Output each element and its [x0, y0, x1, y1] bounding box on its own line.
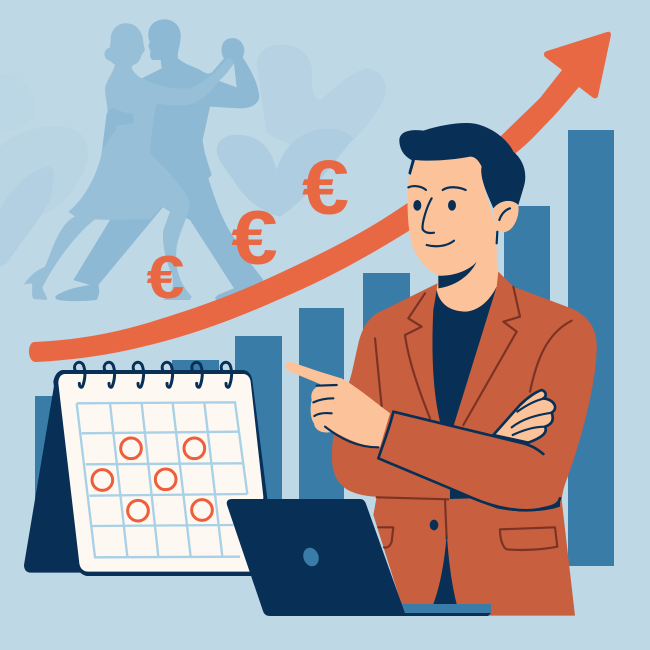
laptop base: [400, 604, 491, 616]
euro symbols: [146, 146, 349, 311]
bar 2: [172, 360, 219, 400]
marked dates: [92, 438, 212, 521]
background blobs: [0, 45, 386, 267]
lapels: [375, 287, 572, 550]
pointing hand: [286, 362, 390, 447]
facial lines: [408, 186, 510, 246]
calendar frame: [53, 370, 268, 576]
shirt hem: [450, 488, 560, 511]
bar 6: [504, 206, 550, 316]
clasped hand: [106, 108, 133, 125]
bar chart: [35, 130, 614, 566]
eyes: [413, 200, 456, 211]
button: [430, 520, 438, 530]
jacket: [332, 272, 597, 616]
bar 4: [299, 308, 344, 500]
hair: [399, 123, 525, 208]
laptop base shadow: [400, 613, 491, 616]
euro small: €: [146, 244, 185, 311]
laptop: [227, 499, 491, 616]
neck: [437, 243, 498, 312]
man: [286, 123, 597, 616]
jacket opening: [433, 533, 457, 604]
bar 1: [35, 396, 60, 506]
calendar stand: [24, 380, 93, 573]
fist: [222, 38, 243, 59]
finger lines: [512, 398, 552, 435]
laptop logo: [301, 546, 321, 568]
calendar page: [58, 374, 263, 572]
euro large: €: [302, 146, 349, 231]
growth arrow: [29, 32, 611, 362]
folded sleeve: [378, 412, 567, 510]
neck shadow: [438, 262, 477, 288]
calendar grid: [77, 402, 247, 557]
laptop screen: [227, 499, 406, 616]
shirt: [432, 287, 497, 427]
spiral rings: [75, 362, 232, 387]
bar 7: [568, 130, 614, 566]
pointing hand lines: [313, 385, 378, 447]
sleeve outline: [378, 412, 560, 510]
ear: [493, 199, 519, 232]
bar 5: [363, 273, 410, 353]
desk calendar: [24, 362, 268, 576]
euro medium: €: [231, 196, 278, 280]
male dancer: [55, 19, 263, 301]
tucked hand: [493, 390, 555, 443]
female dancer: [24, 23, 234, 300]
dancers silhouette: [24, 19, 263, 301]
bar 3: [235, 336, 282, 516]
face: [408, 157, 497, 276]
